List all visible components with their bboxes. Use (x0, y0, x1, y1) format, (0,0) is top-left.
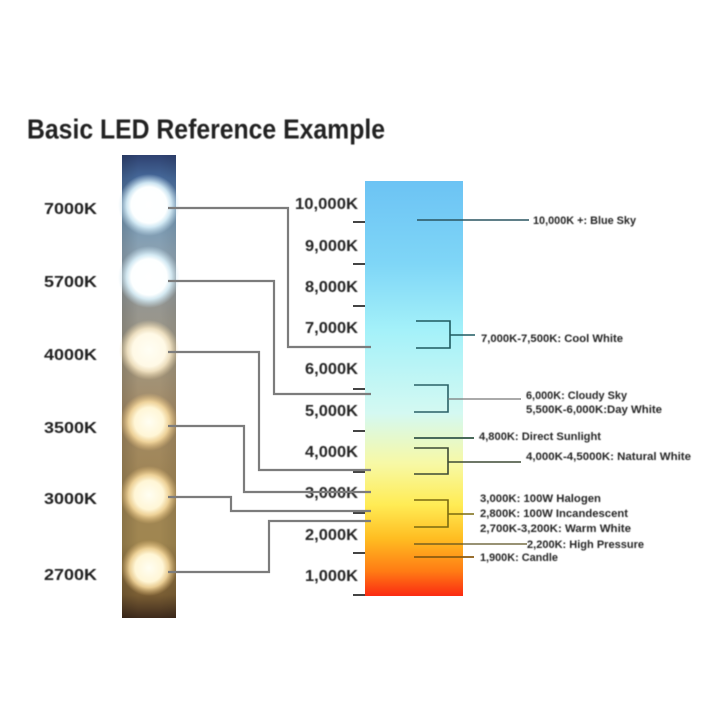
scale labels: 5,000K (305, 403, 358, 420)
scale labels: 6,000K (305, 361, 358, 378)
title: Basic LED Reference Example (27, 114, 385, 144)
LED strip kelvin labels: 5700K (44, 274, 97, 291)
icon: 5700K LED (118, 246, 180, 308)
LED strip kelvin labels: 3500K (44, 420, 97, 437)
scale labels: 3,000K (305, 485, 358, 502)
reference annotations: 6,000K: Cloudy Sky (526, 390, 627, 402)
icon: 4000K LED (119, 320, 179, 380)
reference annotations (479, 215, 691, 564)
reference annotations: 1,900K: Candle (480, 552, 558, 564)
reference annotations: 4,800K: Direct Sunlight (479, 431, 601, 443)
scale labels: 7,000K (305, 320, 358, 337)
LED strip kelvin labels (44, 201, 97, 584)
scale labels: 10,000K (295, 196, 358, 213)
reference annotations: 2,800K: 100W Incandescent (480, 508, 628, 520)
scale labels: 4,000K (305, 444, 358, 461)
reference annotations: 2,200K: High Pressure (527, 539, 644, 551)
connector lines from LEDs to scale (168, 208, 371, 572)
reference annotations: 2,700K-3,200K: Warm White (480, 523, 631, 535)
LED strip kelvin labels: 4000K (44, 347, 97, 364)
reference annotations: 3,000K: 100W Halogen (480, 493, 601, 505)
scale labels (295, 196, 358, 585)
scale labels: 1,000K (305, 568, 358, 585)
scale labels: 9,000K (305, 238, 358, 255)
icon: 2700K LED (121, 540, 177, 596)
reference annotations: 10,000K +: Blue Sky (533, 215, 636, 227)
LED strip kelvin labels: 2700K (44, 567, 97, 584)
LED strip kelvin labels: 3000K (44, 491, 97, 508)
icon: 7000K LED (118, 174, 180, 236)
icon: 3500K LED (120, 393, 178, 451)
LED strip kelvin labels: 7000K (44, 201, 97, 218)
icon: 3000K LED (120, 466, 178, 524)
reference brackets and leader lines (414, 220, 529, 557)
scale labels: 8,000K (305, 279, 358, 296)
LED strip photo (118, 155, 180, 618)
scale labels: 2,000K (305, 527, 358, 544)
reference annotations: 7,000K-7,500K: Cool White (481, 333, 623, 345)
scale tick marks (353, 222, 365, 595)
colour temperature gradient scale (365, 181, 463, 596)
reference annotations: 4,000K-4,5000K: Natural White (526, 451, 691, 463)
reference annotations: 5,500K-6,000K:Day White (526, 404, 662, 416)
